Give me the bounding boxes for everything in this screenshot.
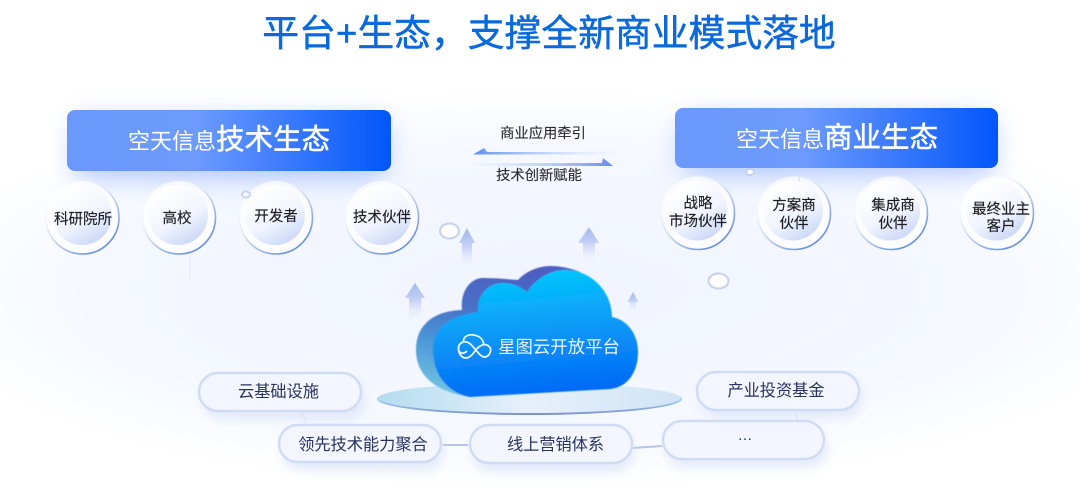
dashed guide lines: [330, 206, 728, 372]
circle: 集成商伙伴: [854, 176, 928, 250]
arrow: rising left inner: [459, 228, 475, 268]
circle: 科研院所: 科研院所: [54, 211, 112, 228]
icon: cloud with platform name: [416, 266, 638, 397]
circle: 方案商伙伴: 伙伴: [780, 215, 808, 232]
circle: 科研院所: [46, 181, 119, 254]
circle: 开发者: 开发者: [254, 208, 298, 225]
circle: 最终业主客户: 最终业主: [972, 201, 1030, 218]
circle: 高校: [142, 181, 216, 254]
label: 技术创新赋能: 技术创新赋能: [496, 167, 582, 184]
arrow: pointing right: [473, 158, 613, 166]
circle: 技术伙伴: [346, 181, 418, 254]
circle: 方案商伙伴: [758, 176, 830, 250]
pill: ellipsis: …: [738, 427, 752, 444]
icon: cloud logo: [458, 335, 491, 358]
panel: technology ecosystem header: 空天信息技术生态: [128, 124, 330, 156]
arrow: rising right outer: [628, 292, 638, 311]
circle: 最终业主客户: [960, 176, 1034, 250]
panel: business ecosystem header: [675, 108, 998, 174]
circle: 技术伙伴: 技术伙伴: [353, 209, 411, 226]
panel: business ecosystem header: 空天信息商业生态: [736, 122, 938, 154]
pill: 云基础设施: [199, 373, 365, 420]
arrow: rising left outer: [405, 283, 425, 320]
panel: technology ecosystem members: [46, 181, 418, 254]
pill: 云基础设施: 云基础设施: [238, 383, 319, 401]
connectors between pills: [302, 411, 798, 448]
circle: 战略市场伙伴: 市场伙伴: [669, 213, 727, 230]
circle: 战略市场伙伴: [662, 176, 734, 250]
pill: 线上营销体系: 线上营销体系: [507, 436, 604, 454]
circle: 开发者: [240, 181, 312, 254]
circle: 战略市场伙伴: 战略: [684, 195, 713, 212]
pill: 产业投资基金: [697, 372, 862, 418]
arrow: rising right inner: [578, 227, 599, 262]
pill: 领先技术能力聚合: [279, 425, 444, 471]
title: 平台+生态，支撑全新商业模式落地: [262, 13, 836, 54]
panel: technology ecosystem header: [67, 110, 391, 178]
label: 商业应用牵引: 商业应用牵引: [500, 124, 586, 142]
cloud label: 星图云开放平台: [498, 337, 620, 357]
arrow: pointing left: [473, 148, 613, 154]
panel: business ecosystem members: [662, 176, 1034, 250]
circle: 集成商伙伴: 伙伴: [878, 215, 908, 232]
pill: 线上营销体系: [470, 425, 634, 472]
circle: 高校: 高校: [162, 210, 192, 227]
pill: ellipsis: [663, 421, 828, 468]
circle: 最终业主客户: 客户: [986, 218, 1016, 235]
circle: 集成商伙伴: 集成商: [871, 197, 915, 214]
platform disc: [377, 383, 682, 415]
decorative rings: [242, 169, 754, 288]
circle: 方案商伙伴: 方案商: [772, 196, 816, 214]
pill: 领先技术能力聚合: 领先技术能力聚合: [298, 436, 428, 454]
pill: 产业投资基金: 产业投资基金: [727, 382, 825, 400]
